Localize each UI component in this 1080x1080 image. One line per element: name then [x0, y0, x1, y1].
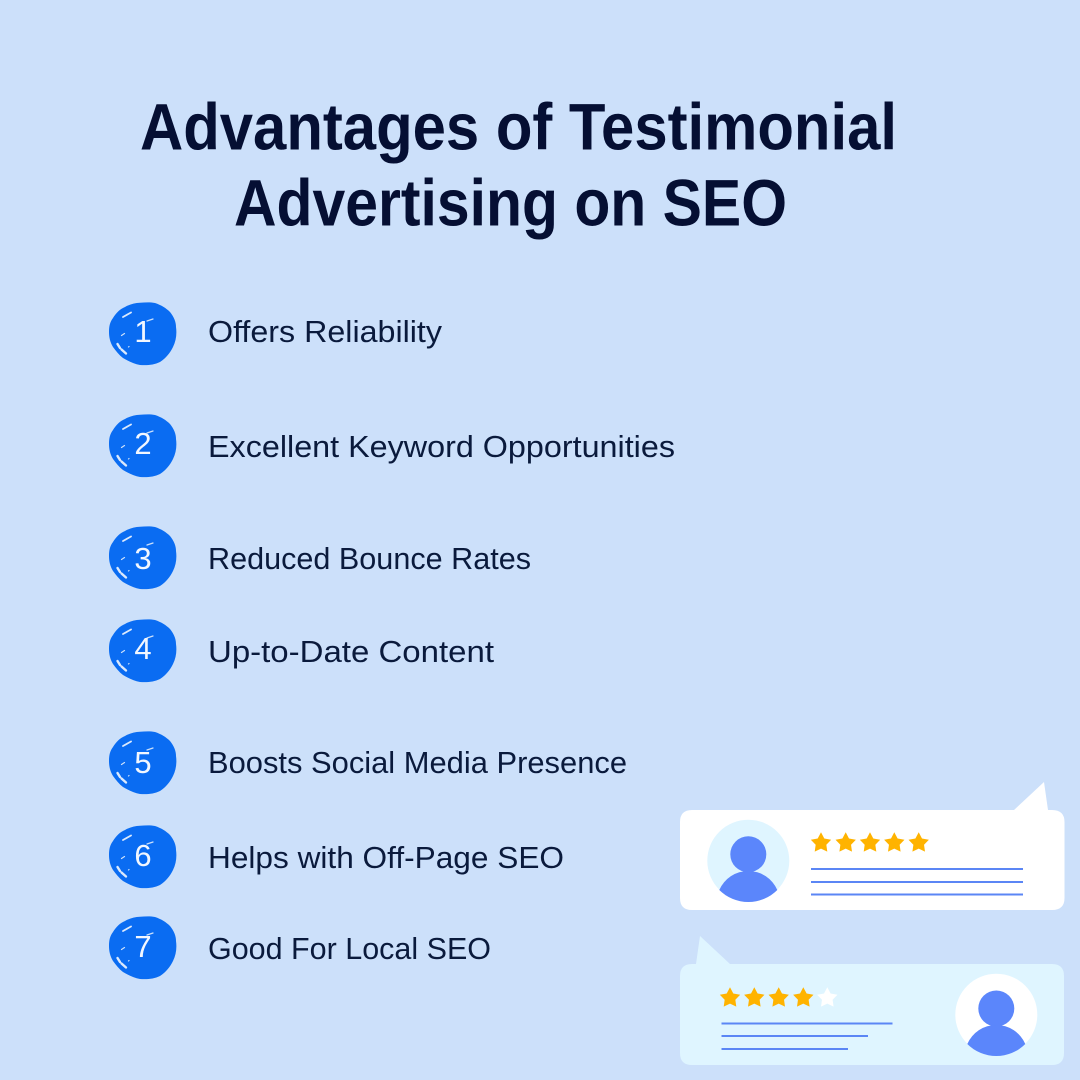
list item 7: [109, 916, 491, 979]
list item 5: [109, 731, 627, 794]
list item 6: 6: [134, 838, 152, 873]
list item 5: Boosts Social Media Presence: [208, 745, 627, 780]
title: Advertising on SEO: [234, 166, 787, 240]
review bubble: five stars: [680, 782, 1064, 910]
list item 7: Good For Local SEO: [208, 931, 491, 966]
title: [140, 90, 897, 240]
list item 4: Up-to-Date Content: [208, 634, 494, 669]
icon: avatar: [955, 974, 1037, 1056]
list item 1: Offers Reliability: [208, 314, 443, 349]
icon: avatar: [707, 820, 789, 902]
list item 4: [109, 619, 494, 682]
list item 3: 3: [134, 541, 152, 576]
list item 6: [109, 825, 564, 888]
title: Advantages of Testimonial: [140, 90, 897, 164]
four of five star rating: [720, 987, 837, 1007]
list item 6: Helps with Off-Page SEO: [208, 840, 564, 875]
list item 2: [109, 414, 675, 477]
list item 3: Reduced Bounce Rates: [208, 541, 531, 576]
list item 1: [109, 302, 443, 365]
five star rating: [811, 832, 929, 852]
review bubble: four stars: [680, 936, 1064, 1065]
list item 2: 2: [134, 426, 152, 461]
list item 5: 5: [134, 745, 152, 780]
list item 4: 4: [134, 631, 152, 666]
list item 3: [109, 526, 531, 589]
list item 2: Excellent Keyword Opportunities: [208, 429, 675, 464]
list item 7: 7: [134, 929, 152, 964]
list item 1: 1: [134, 314, 152, 349]
